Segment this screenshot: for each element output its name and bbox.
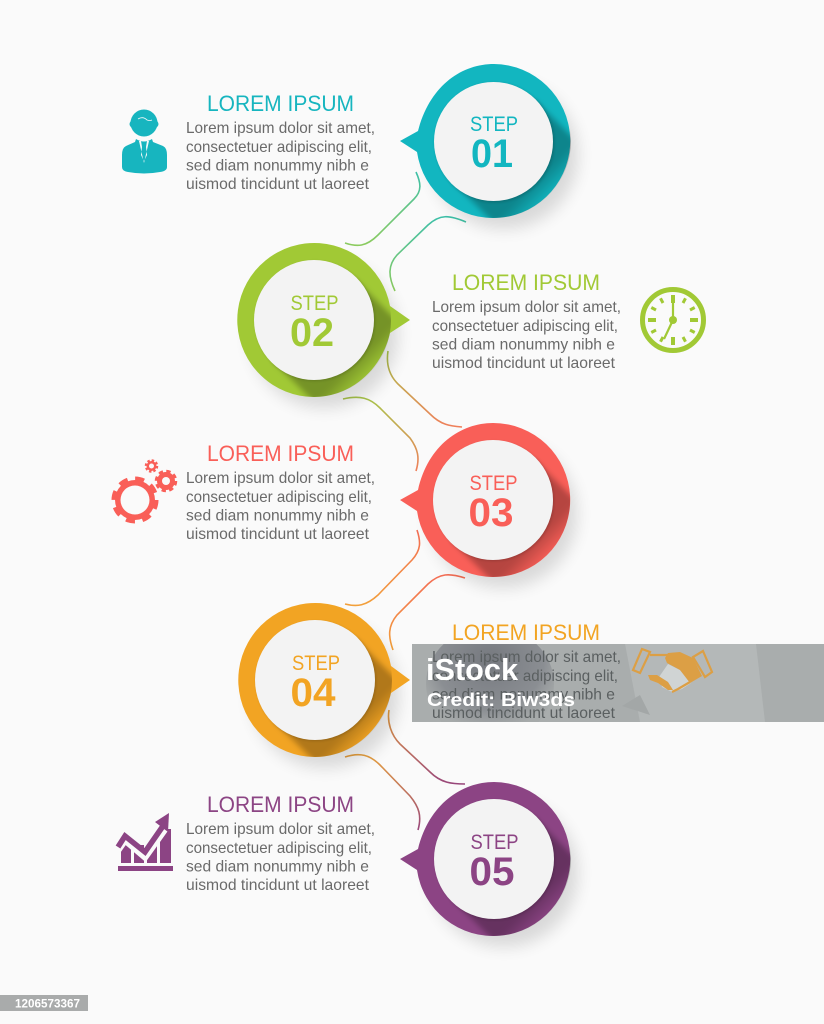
text block: step 5: uismod tincidunt ut laoreet [186,877,370,894]
text block: step 2: sed diam nonummy nibh e [432,336,615,354]
text block: step 4: Lorem ipsum dolor sit amet, [432,649,621,666]
icon: clock [642,290,704,350]
step 4 badge [238,603,414,779]
image id badge: 1206573367 [15,998,80,1010]
connector lines: step 2 to step 3 [343,351,462,471]
icon: businessman [122,110,167,174]
text block: step 4: consectetuer adipiscing elit, [432,668,618,685]
step 5 badge [400,782,593,958]
text block: step 3: consectetuer adipiscing elit, [186,489,372,506]
step 2 badge: 02 [290,311,334,355]
icon: gears [114,460,176,521]
step 3 badge: STEP [470,472,518,495]
step 5 badge: 05 [470,850,514,894]
text block: step 4: LOREM IPSUM [452,620,600,645]
step 1 badge [400,64,593,240]
step 1 badge: 01 [471,132,513,176]
step 2 badge: STEP [290,292,338,315]
text block: step 1: uismod tincidunt ut laoreet [186,176,370,193]
text block: step 1: sed diam nonummy nibh e [186,158,369,174]
text block: step 1: LOREM IPSUM [207,91,354,116]
text block: step 5: consectetuer adipiscing elit, [186,840,372,857]
text block: step 4: uismod tincidunt ut laoreet [432,705,616,722]
text block: step 4: sed diam nonummy nibh e [432,686,615,704]
text block: step 3: LOREM IPSUM [207,441,354,466]
step 2 badge [237,243,413,419]
step 3 badge [400,423,592,599]
text block: step 4 [432,620,621,722]
icon: handshake [633,649,712,692]
text block: step 3: sed diam nonummy nibh e [186,508,369,524]
text block: step 2: LOREM IPSUM [452,270,600,295]
watermark: iStock credit text: Credit: Biw3ds [427,690,575,710]
text block: step 1 [186,91,375,193]
step 1 badge: STEP [470,113,518,136]
connector lines: step 1 to step 2 [345,172,466,291]
text block: step 5: sed diam nonummy nibh e [186,858,369,876]
text block: step 1: consectetuer adipiscing elit, [186,139,372,156]
text block: step 3 [186,441,375,543]
watermark: iStock credit text [426,652,575,710]
icon: growth chart [118,813,173,871]
watermark: iStock credit text: iStock [426,652,519,687]
text block: step 2: consectetuer adipiscing elit, [432,318,618,335]
text block: step 3: uismod tincidunt ut laoreet [186,526,370,543]
text block: step 2: Lorem ipsum dolor sit amet, [432,299,621,316]
image id badge [0,995,88,1011]
text block: step 2: uismod tincidunt ut laoreet [432,355,616,372]
text block: step 3: Lorem ipsum dolor sit amet, [186,470,375,487]
text block: step 5: Lorem ipsum dolor sit amet, [186,821,375,838]
connector lines: step 3 to step 4 [345,530,465,650]
step 5 badge: STEP [470,831,518,854]
text block: step 2 [432,270,621,372]
watermark band background [412,644,824,722]
step 3 badge: 03 [468,491,514,535]
step 4 badge: STEP [292,652,340,675]
step 4 badge: 04 [290,671,336,715]
text block: step 1: Lorem ipsum dolor sit amet, [186,120,375,137]
connector lines: step 4 to step 5 [345,710,465,830]
text block: step 5 [186,792,375,894]
text block: step 5: LOREM IPSUM [207,792,354,817]
